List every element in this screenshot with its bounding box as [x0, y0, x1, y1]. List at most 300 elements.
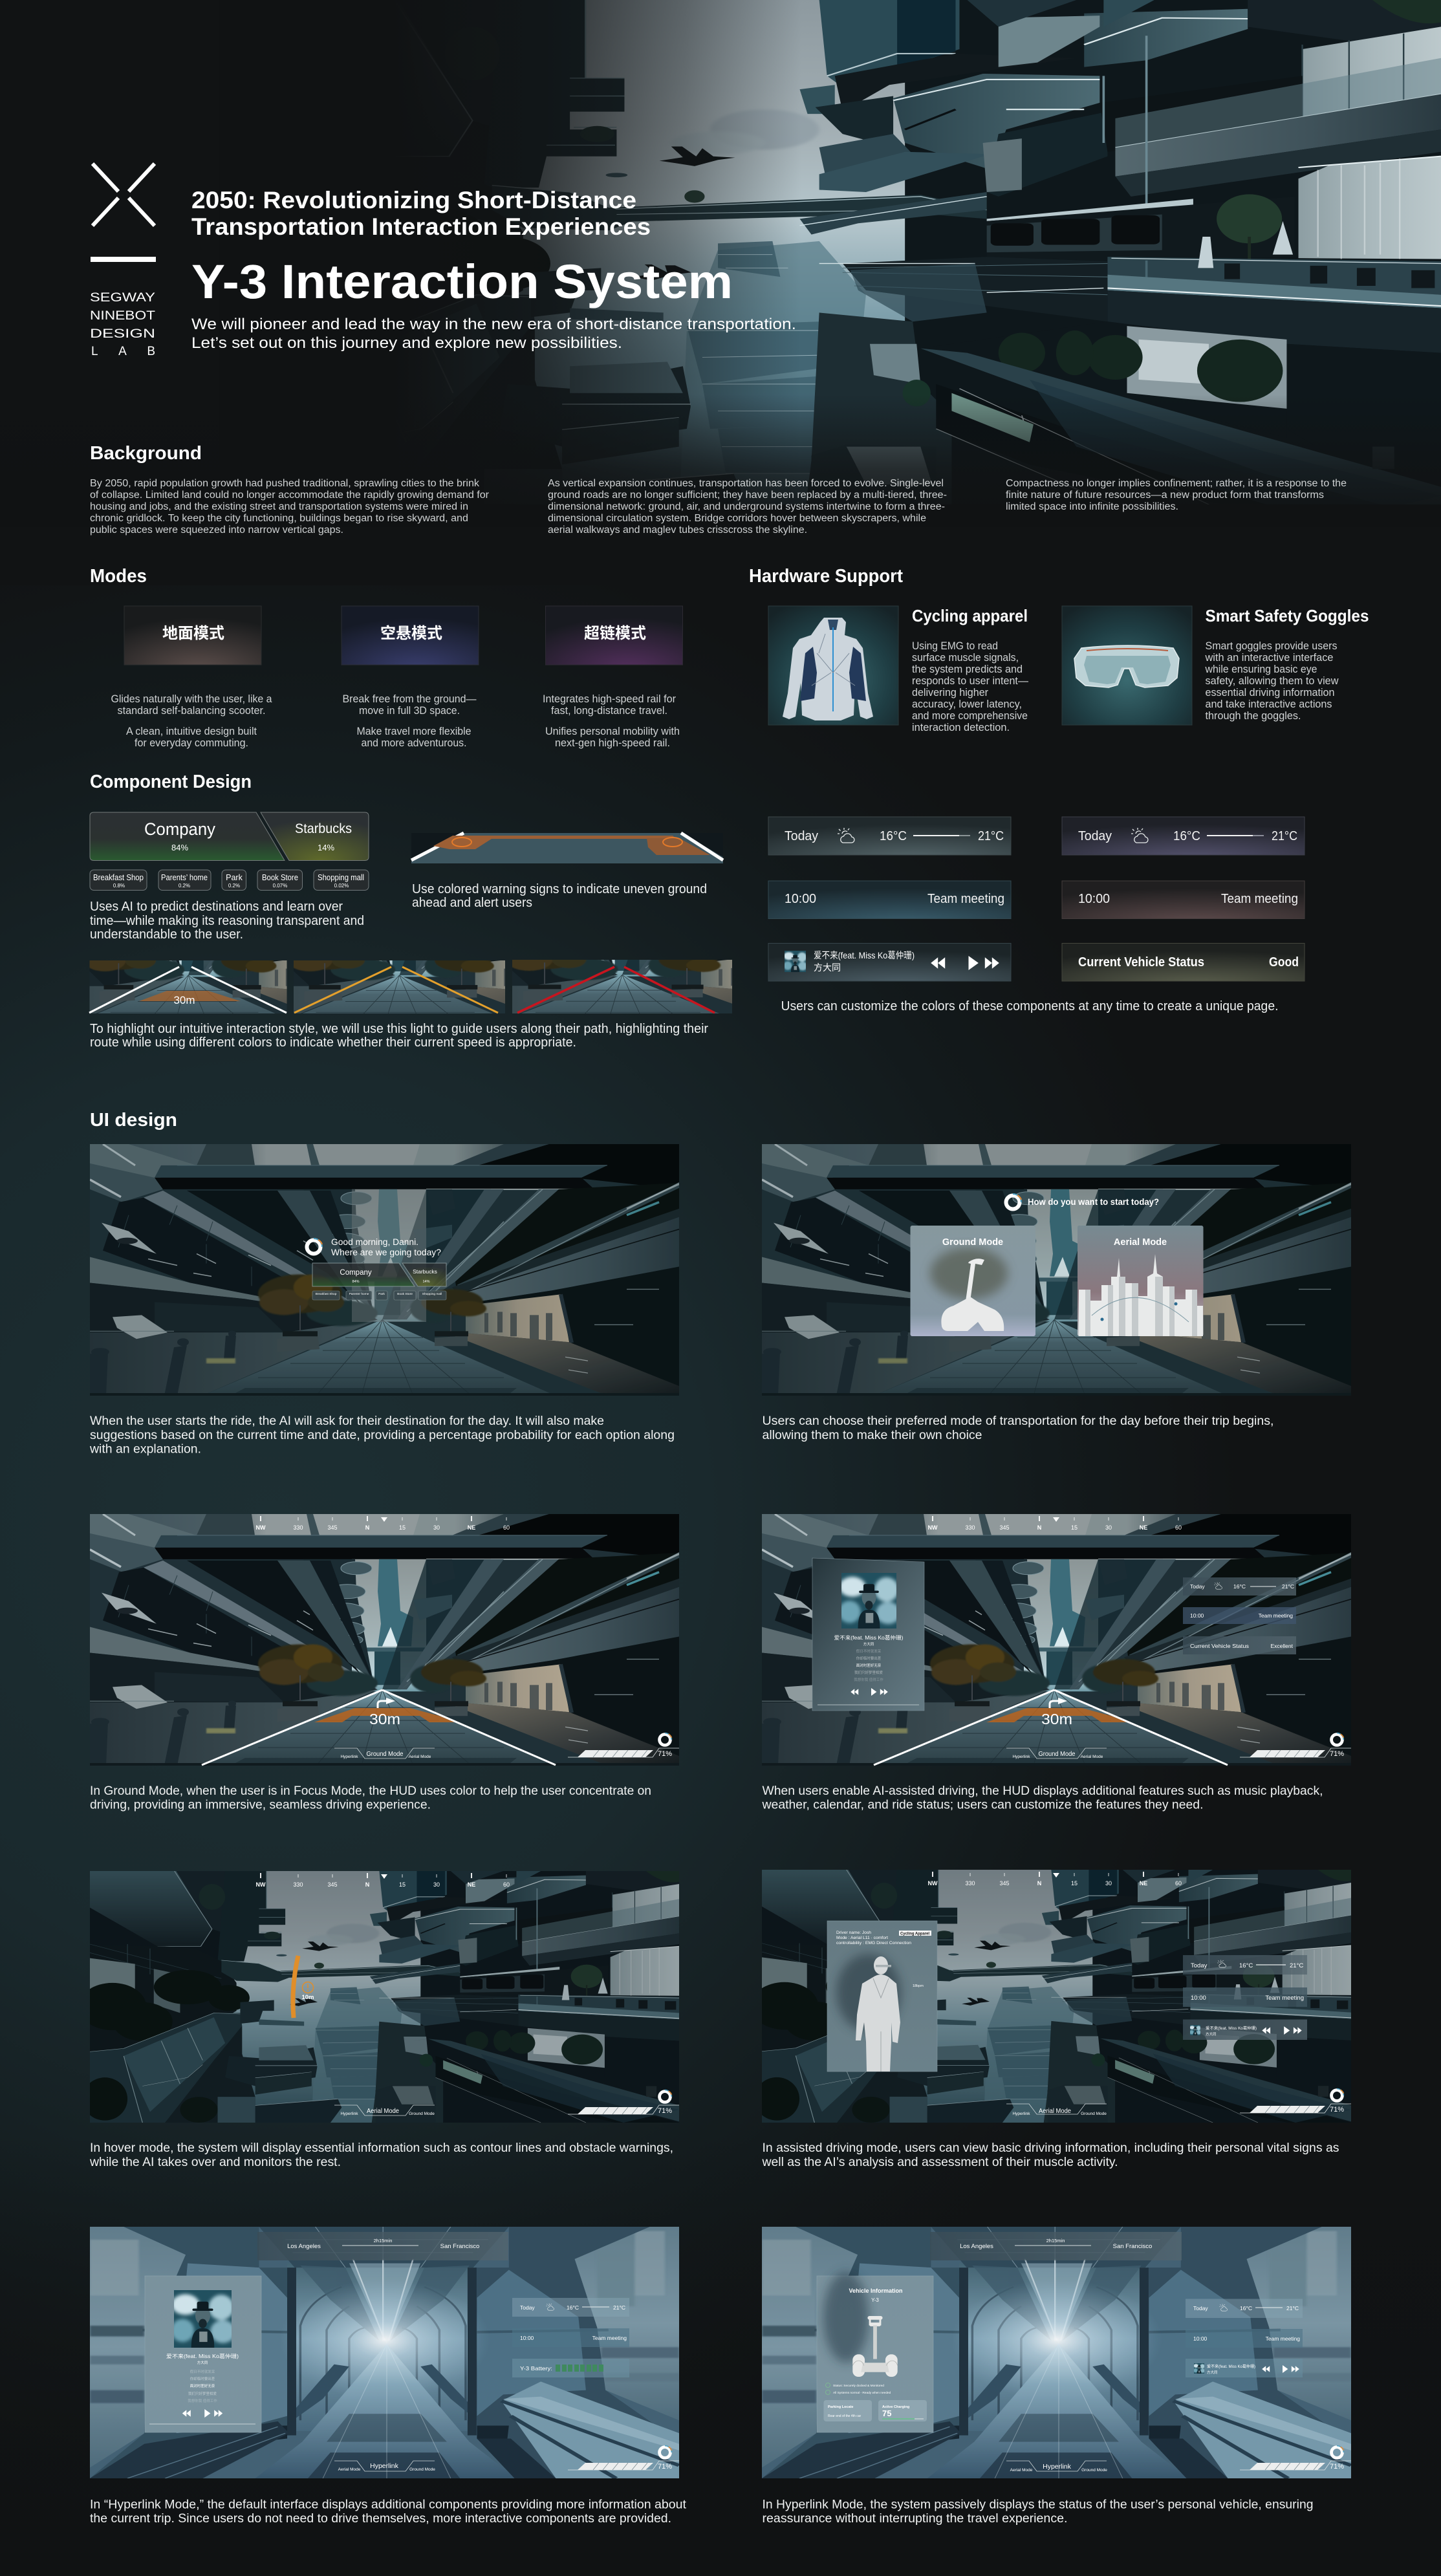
route bar: San Francisco	[440, 2243, 479, 2250]
text: guide light description: To highlight our intuitive interaction style, we will use this light to guide users along their path, highlighting their	[90, 1022, 708, 1036]
card: music player: 你却临时要出差	[856, 1656, 882, 1661]
icon: X mark	[0, 0, 155, 226]
mini destination widget: Book Store	[397, 1292, 413, 1296]
section: background: limited space into infinite possibilities.	[1006, 501, 1178, 512]
component: music widget: 方大同	[814, 962, 841, 973]
panel: smart safety goggles: Smart Safety Goggles	[1206, 606, 1369, 625]
component: destination prediction	[90, 812, 369, 890]
mini destination widget: Starbucks	[413, 1268, 437, 1275]
compass: NW	[927, 1524, 938, 1531]
compass: 345	[327, 1881, 338, 1888]
text: screen 7 description: In “Hyperlink Mode,” the default interface displays additional components providing more information about	[90, 2498, 687, 2512]
card: driver information: Driver name: Josh	[836, 1931, 871, 1935]
widgets: weather, calendar, music: 16°C	[1240, 2305, 1252, 2311]
text: mode descriptions: Glides naturally with the user, like a	[111, 693, 272, 705]
text: screen 5 description	[89, 2141, 673, 2169]
card: driver information: controllability : EMG Direct Connection	[836, 1941, 911, 1945]
status: battery 71%: 71%	[1330, 1750, 1344, 1758]
section: background: By 2050, rapid population growth had pushed traditional, sprawling cities to the brink	[90, 478, 479, 489]
text: screen 4 description	[762, 1784, 1323, 1812]
card: music player: 我们只好梦里相爱	[854, 1670, 883, 1675]
road HUD: 30m	[369, 1711, 400, 1727]
hero city image	[0, 0, 1441, 585]
widgets: weather, calendar, status: 21°C	[1282, 1583, 1294, 1590]
compass: 60	[503, 1524, 510, 1531]
mode tabs: Aerial Mode	[367, 2107, 399, 2115]
status: battery 71%: 71%	[658, 1750, 672, 1758]
text: screen 4 description: weather, calendar, and ride status; users can customize the features they need.	[762, 1798, 1203, 1812]
UI screen: hover mode	[79, 1871, 679, 2123]
status: battery 71%	[568, 2090, 679, 2115]
text: screen 6 description: In assisted driving mode, users can view basic driving information, including their personal vital signs as	[762, 2141, 1339, 2155]
card: ground mode: Ground Mode	[942, 1237, 1003, 1248]
panel: smart safety goggles: with an interactive interface	[1205, 651, 1334, 664]
compass	[256, 1873, 510, 1888]
text: mode descriptions: move in full 3D space.	[359, 704, 460, 717]
component: destination prediction: 84%	[171, 843, 188, 852]
road image: yellow line	[134, 827, 669, 1040]
widgets: weather, calendar, status: Current Vehicle Status	[1190, 1643, 1249, 1649]
obstacle warning arc: 10m	[301, 1994, 314, 2001]
heading: Hardware Support: Hardware Support	[749, 566, 903, 587]
route bar: Los Angeles	[960, 2243, 993, 2250]
panel: cycling apparel: Cycling apparel	[912, 606, 1028, 625]
UI screen: destination prompt: Good morning, Danni.	[331, 1237, 418, 1247]
obstacle warning arc	[293, 1956, 314, 2018]
component: vehicle status widget	[1062, 943, 1305, 981]
road HUD	[202, 1690, 556, 1765]
text: mode descriptions: Integrates high-speed rail for	[543, 693, 676, 705]
component: weather widget grey: Today	[785, 829, 818, 843]
card: music player: 你却临时要出差	[190, 2376, 215, 2381]
status: battery 71%: 71%	[1330, 2106, 1344, 2114]
component: destination prediction: Parents’ home	[161, 873, 208, 882]
text: screen 5 description: while the AI takes over and monitors the rest.	[89, 2155, 341, 2169]
card: vehicle information: Active Charging	[882, 2405, 909, 2409]
widgets: weather, calendar, music: Team meeting	[1266, 2335, 1300, 2342]
heading: Component Design: Component Design	[90, 772, 252, 792]
component: destination prediction: Breakfast Shop	[93, 873, 144, 882]
text: screen 4 description: When users enable AI-assisted driving, the HUD displays additional features such as music playback,	[762, 1784, 1323, 1798]
section: background: Background	[90, 443, 202, 464]
card: vehicle information: Rear end of the 4th car	[828, 2414, 861, 2418]
mode tabs	[334, 2105, 435, 2116]
status: battery 71%: 71%	[658, 2107, 672, 2115]
widgets: weather, calendar, status	[1183, 1577, 1296, 1654]
compass: 30	[1105, 1880, 1112, 1887]
panel: cycling apparel: delivering higher	[912, 686, 988, 698]
compass: NE	[468, 1881, 475, 1888]
compass: 345	[999, 1880, 1010, 1887]
component: destination prediction: 0.2%	[228, 883, 240, 889]
section: background: chronic gridlock. To keep the city functioning, buildings began to rise skyward, and	[90, 513, 468, 524]
panel: mode cards: 超链模式	[584, 625, 646, 642]
panel: cycling apparel	[768, 606, 1028, 733]
text: mode descriptions: fast, long-distance travel.	[551, 704, 667, 717]
road HUD	[874, 1690, 1228, 1765]
widgets: weather, calendar, music	[1183, 1955, 1307, 2040]
logo: Segway Ninebot Design Lab: LAB	[91, 345, 155, 358]
text: screen 3 description	[90, 1784, 651, 1812]
section: background: housing and jobs, and the existing street and transportation systems were mired in	[90, 501, 468, 512]
component: calendar widget rose: 10:00	[1078, 892, 1110, 906]
card: vehicle information: Parking Locate	[828, 2405, 853, 2409]
text: screen 2 description	[762, 1414, 1274, 1442]
component: weather widget grey: 21°C	[978, 829, 1004, 843]
text: screen 6 description: well as the AI’s analysis and assessment of their muscle activity.	[762, 2155, 1118, 2169]
card: music player	[145, 2276, 261, 2432]
mini destination widget: Breakfast Shop	[316, 1292, 337, 1296]
compass: NE	[468, 1524, 475, 1531]
road image: white line	[0, 827, 440, 1040]
widgets: weather, calendar, music: 方大同	[1206, 2031, 1217, 2037]
section: background: dimensional network: ground, air, and underground systems intertwine to form a three-	[548, 501, 945, 512]
widgets: weather, calendar, battery: Y-3 Battery:	[520, 2365, 552, 2372]
title block: Y-3 Interaction System	[191, 255, 733, 308]
card: music player: 我们只好梦里相爱	[188, 2391, 217, 2396]
text: screen 8 description: reassurance without interrupting the travel experience.	[762, 2511, 1067, 2526]
UI screen: ground focus mode	[90, 1514, 679, 1766]
mini destination widget: Park	[378, 1292, 385, 1296]
panel: smart safety goggles: through the goggles.	[1206, 709, 1301, 722]
icon: self-balancing scooter	[852, 2316, 898, 2377]
card: ground mode	[911, 1226, 1035, 1336]
mode tabs: Hyperlink	[370, 2462, 399, 2470]
component: weather widget lilac: 21°C	[1272, 829, 1297, 843]
mode tabs: Ground Mode	[1081, 2468, 1107, 2473]
section: background: of collapse. Limited land could no longer accommodate the rapidly growing demand for	[90, 490, 489, 501]
text: mode descriptions: next-gen high-speed rail.	[555, 737, 670, 749]
text: screen 2 description: Users can choose their preferred mode of transportation for the day before their trip begins,	[762, 1414, 1274, 1428]
widgets: weather, calendar, music: 10:00	[1193, 2335, 1208, 2342]
panel: smart safety goggles	[1062, 606, 1369, 725]
card: music player: 爱不来(feat. Miss Ko葛仲珊)	[166, 2353, 239, 2359]
route bar: San Francisco	[1113, 2243, 1152, 2250]
UI screen: hyperlink mode with vehicle information	[762, 2227, 1351, 2478]
panel: cycling apparel: the system predicts and	[912, 663, 1023, 675]
card: music player: 假日不时就发呆	[856, 1649, 882, 1654]
panel: cycling apparel: and more comprehensive	[912, 709, 1028, 722]
text: screen 3 description: In Ground Mode, when the user is in Focus Mode, the HUD uses color to help the user concentrate on	[90, 1784, 651, 1798]
compass: 60	[1175, 1524, 1182, 1531]
card: music player: 爱不来(feat. Miss Ko葛仲珊)	[834, 1634, 904, 1641]
status: battery 71%	[1240, 2446, 1351, 2471]
text: screen 2 description: allowing them to make their own choice	[762, 1428, 982, 1442]
component: destination prediction: Park	[226, 873, 243, 882]
panel: smart safety goggles: essential driving information	[1206, 686, 1335, 698]
text: mode descriptions: and more adventurous.	[361, 737, 467, 749]
widgets: weather, calendar, status: 16°C	[1233, 1583, 1246, 1590]
widgets: weather, calendar, battery: 10:00	[520, 2335, 534, 2341]
card: vehicle information: Status: Securely docked & Monitored	[833, 2384, 884, 2388]
component: destination prediction: 0.07%	[273, 883, 287, 889]
logo: Segway Ninebot Design Lab: NINEBOT	[90, 309, 155, 323]
UI screen: assisted ground mode	[762, 1514, 1351, 1766]
text: screen 1 description: with an explanation.	[89, 1442, 201, 1456]
compass: 330	[293, 1881, 303, 1888]
compass: 60	[1175, 1880, 1182, 1887]
text: guide light description: route while using different colors to indicate whether their current speed is appropriate.	[90, 1035, 576, 1050]
compass: 330	[293, 1524, 303, 1531]
component: destination prediction: 0.2%	[179, 883, 190, 889]
component: weather widget lilac: 16°C	[1173, 829, 1200, 843]
status: battery 71%: 71%	[1330, 2463, 1344, 2471]
card: music player: 我想你我 值得工作	[854, 1677, 883, 1682]
mode tabs: Aerial Mode	[338, 2467, 361, 2472]
compass: 345	[327, 1524, 338, 1531]
mode tabs	[1006, 1748, 1107, 1759]
text: mode descriptions: Unifies personal mobility with	[545, 725, 680, 737]
mini destination widget	[312, 1263, 446, 1300]
mode tabs: Hyperlink	[1043, 2463, 1072, 2471]
card: aerial mode	[1078, 1226, 1203, 1336]
widgets: weather, calendar, status: Excellent	[1270, 1643, 1294, 1649]
compass: 345	[999, 1524, 1010, 1531]
widgets: weather, calendar, music: 21°C	[1290, 1962, 1303, 1969]
component: destination prediction: 0.02%	[334, 883, 349, 889]
mode tabs: Aerial Mode	[409, 1755, 431, 1759]
route bar	[257, 2232, 508, 2260]
panel: cycling apparel: accuracy, lower latency,	[912, 698, 1022, 710]
panel: cycling apparel: interaction detection.	[912, 721, 1010, 733]
status: battery 71%	[1240, 2089, 1351, 2114]
section: background: aerial walkways and maglev tubes crisscross the skyline.	[548, 525, 807, 536]
text: screen 8 description	[762, 2498, 1313, 2526]
panel: smart safety goggles: and take interactive actions	[1206, 698, 1332, 710]
status: battery 71%	[568, 2446, 679, 2471]
panel: smart safety goggles: safety, allowing them to view	[1206, 675, 1339, 687]
city model	[1079, 1254, 1203, 1336]
UI screen: hyperlink mode with music	[90, 2227, 679, 2478]
text: customization description: Users can customize the colors of these components at any time to create a unique page.	[781, 999, 1278, 1013]
section: background: As vertical expansion continues, transportation has been forced to evolve. Single-level	[548, 478, 944, 489]
mode tabs: Ground Mode	[1081, 2112, 1107, 2116]
card: vehicle information: All Systems normal - Ready when needed	[833, 2391, 891, 2395]
card: driver information: Mode : Aerial L11 · comfort	[836, 1936, 888, 1940]
component: calendar widget rose: Team meeting	[1221, 892, 1298, 906]
compass: 330	[965, 1524, 975, 1531]
route bar: Los Angeles	[287, 2243, 321, 2250]
component: destination prediction: Starbucks	[295, 821, 352, 836]
mode tabs	[1006, 2104, 1107, 2116]
widgets: weather, calendar, battery: 21°C	[613, 2304, 625, 2311]
widgets: weather, calendar, battery: 16°C	[567, 2304, 579, 2311]
panel: cycling apparel: Using EMG to read	[912, 640, 998, 652]
mode tabs: Ground Mode	[409, 2112, 435, 2116]
mode tabs: Aerial Mode	[1039, 2107, 1071, 2115]
road image: red line	[346, 824, 903, 1040]
card: vehicle information	[817, 2272, 933, 2432]
text: screen 7 description	[90, 2498, 687, 2526]
component: calendar widget blue: Team meeting	[927, 892, 1004, 906]
mode tabs	[1006, 2461, 1107, 2473]
card: driver information: Cycling Apparel	[900, 1932, 929, 1936]
status: battery 71%	[1240, 1733, 1351, 1758]
widgets: weather, calendar, battery: Team meeting	[592, 2335, 627, 2341]
panel: mode cards	[124, 606, 683, 665]
widgets: weather, calendar, music: Team meeting	[1265, 1995, 1304, 2002]
widgets: weather, calendar, music: Today	[1193, 2305, 1208, 2311]
text: AI prediction description: time—while making its reasoning transparent and	[90, 914, 364, 928]
compass: 15	[1071, 1880, 1078, 1887]
mode tabs: Ground Mode	[1039, 1750, 1076, 1758]
component: destination prediction: Book Store	[262, 873, 298, 882]
widgets: weather, calendar, music: Today	[1191, 1962, 1208, 1969]
mini destination widget: Shopping mall	[422, 1292, 442, 1296]
compass: N	[1037, 1524, 1041, 1531]
card: music player: 我想你我 值得工作	[188, 2398, 217, 2403]
compass: 60	[503, 1881, 510, 1888]
mode tabs	[334, 2461, 435, 2472]
UI screen: mode selection	[762, 1144, 1351, 1396]
compass	[927, 1872, 1182, 1887]
card: music player: 方大同	[197, 2360, 208, 2365]
card: music player: 方大同	[863, 1641, 874, 1647]
panel: cycling apparel: responds to user intent—	[912, 675, 1028, 687]
text: screen 1 description	[89, 1414, 675, 1456]
section: background: public spaces were squeezed into narrow vertical gaps.	[90, 525, 343, 536]
icon: jacket	[783, 618, 873, 720]
component: music widget	[768, 943, 1011, 981]
component: calendar widget blue	[768, 881, 1011, 918]
widgets: weather, calendar, status: 10:00	[1190, 1612, 1204, 1619]
widgets: weather, calendar, status: Team meeting	[1259, 1612, 1293, 1619]
mode tabs: Aerial Mode	[1010, 2468, 1033, 2473]
widgets: weather, calendar, music: 21°C	[1286, 2305, 1299, 2311]
component: destination prediction: Company	[144, 819, 215, 839]
title block: 2050: Revolutionizing Short-Distance	[191, 187, 636, 213]
text: mode descriptions: standard self-balancing scooter.	[118, 704, 265, 717]
text: screen 6 description	[762, 2141, 1339, 2169]
status: battery 71%: 71%	[658, 2463, 672, 2471]
component: calendar widget rose	[1062, 881, 1305, 918]
mode tabs: Ground Mode	[366, 1750, 404, 1758]
compass: NW	[256, 1881, 266, 1888]
logo: Segway Ninebot Design Lab: SEGWAY	[90, 291, 155, 305]
component: weather widget grey	[768, 817, 1011, 855]
text: mode descriptions: for everyday commuting.	[135, 737, 248, 749]
component: weather widget grey: 16°C	[880, 829, 907, 843]
title block: Transportation Interaction Experiences	[191, 213, 651, 240]
widgets: weather, calendar, music: 16°C	[1239, 1962, 1253, 1969]
component: music widget: 爱不来(feat. Miss Ko葛仲珊)	[814, 950, 915, 960]
title block: Let’s set out on this journey and explore new possibilities.	[191, 334, 622, 352]
road image: white line: 30m	[173, 994, 195, 1006]
logo: Segway Ninebot Design Lab: DESIGN	[90, 327, 155, 341]
compass: N	[1037, 1880, 1041, 1887]
route bar: 2h15min	[1046, 2238, 1065, 2244]
panel: cycling apparel: surface muscle signals,	[912, 651, 1019, 664]
mode tabs: Hyperlink	[1012, 2112, 1030, 2116]
widgets: weather, calendar, music	[1186, 2299, 1303, 2377]
text: screen 5 description: In hover mode, the system will display essential information such as contour lines and obstacle warnings,	[90, 2141, 673, 2155]
title block: We will pioneer and lead the way in the new era of short-distance transportation.	[191, 316, 796, 333]
compass: 30	[433, 1881, 440, 1888]
panel: mode cards: 空悬模式	[380, 625, 442, 642]
card: vehicle information: 75	[882, 2408, 891, 2418]
card: music player: 假日不时就发呆	[190, 2369, 215, 2374]
text: screen 3 description: driving, providing an immersive, seamless driving experience.	[90, 1798, 431, 1812]
component: weather widget lilac: Today	[1078, 829, 1112, 843]
section: background: finite nature of future resources—a new product form that transforms	[1006, 490, 1324, 501]
compass	[256, 1516, 510, 1531]
mini destination widget: Parents’ home	[349, 1292, 369, 1296]
section: background: dimensional circulation system. Bridge corridors hover between skyscrapers, while	[548, 513, 926, 524]
heading: Modes: Modes	[90, 566, 147, 587]
compass: 30	[1105, 1524, 1112, 1531]
card: driver information	[827, 1921, 937, 2072]
panel: smart safety goggles: while ensuring basic eye	[1205, 663, 1317, 675]
component: destination prediction: Shopping mall	[318, 873, 364, 882]
compass: NE	[1140, 1524, 1147, 1531]
title block	[191, 187, 796, 352]
compass: NW	[927, 1880, 938, 1887]
mode tabs	[334, 1748, 435, 1759]
mini destination widget: 84%	[352, 1280, 360, 1284]
text: mode descriptions	[111, 693, 680, 749]
status: battery 71%	[568, 1733, 679, 1758]
mode tabs: Hyperlink	[340, 2112, 358, 2116]
text: screen 1 description: When the user starts the ride, the AI will ask for their destination for the day. It will also make	[90, 1414, 604, 1428]
panel: mode cards: 地面模式	[162, 625, 224, 642]
mode tabs: Aerial Mode	[1081, 1755, 1103, 1759]
widgets: weather, calendar, battery	[512, 2298, 629, 2377]
compass	[927, 1516, 1182, 1531]
widgets: weather, calendar, music: 方大同	[1207, 2370, 1218, 2375]
text: warning sign description: ahead and alert users	[412, 896, 532, 910]
compass: 15	[399, 1881, 406, 1888]
component: calendar widget blue: 10:00	[785, 892, 816, 906]
component: warning sign road strip	[411, 833, 723, 863]
compass: 15	[399, 1524, 406, 1531]
section: background: Compactness no longer implies confinement; rather, it is a response to the	[1006, 478, 1347, 489]
component: vehicle status widget: Good	[1269, 955, 1299, 969]
text: warning sign description	[412, 882, 707, 910]
card: vehicle information: Y-3	[871, 2297, 879, 2303]
text: mode descriptions: A clean, intuitive design built	[126, 725, 257, 737]
component: destination prediction: 14%	[318, 843, 334, 852]
component: vehicle status widget: Current Vehicle Status	[1078, 955, 1204, 969]
mini destination widget: Company	[340, 1269, 372, 1277]
compass: 330	[965, 1880, 975, 1887]
UI screen: destination prompt	[90, 1144, 679, 1396]
compass: NE	[1140, 1880, 1147, 1887]
text: guide light description	[90, 1022, 708, 1050]
compass: NW	[256, 1524, 266, 1531]
card: music player: 面对时差好无奈	[190, 2383, 215, 2388]
route bar	[930, 2232, 1182, 2260]
text: AI prediction description	[90, 900, 364, 942]
panel: smart safety goggles: Smart goggles provide users	[1206, 640, 1338, 652]
text: mode descriptions: Make travel more flexible	[357, 725, 471, 737]
widgets: weather, calendar, music: 爱不来(feat. Miss Ko葛仲珊)	[1206, 2026, 1257, 2031]
compass: N	[365, 1881, 369, 1888]
UI screen: mode selection: How do you want to start today?	[1028, 1197, 1159, 1207]
logo: Segway Ninebot Design Lab	[0, 0, 156, 358]
section: background: ground roads are no longer sufficient; they have been replaced by a multi-tiered, three-	[548, 490, 947, 501]
compass: 30	[433, 1524, 440, 1531]
mini destination widget: 14%	[422, 1280, 430, 1284]
text: screen 8 description: In Hyperlink Mode, the system passively displays the status of the user’s personal vehicle, ensuring	[762, 2498, 1313, 2512]
widgets: weather, calendar, status: Today	[1190, 1583, 1205, 1590]
text: warning sign description: Use colored warning signs to indicate uneven ground	[412, 882, 707, 896]
card: driver information: 18bpm	[913, 1984, 924, 1988]
text: AI prediction description: Uses AI to predict destinations and learn over	[90, 900, 343, 914]
text: AI prediction description: understandable to the user.	[90, 927, 243, 942]
card: aerial mode: Aerial Mode	[1114, 1237, 1167, 1248]
card: music player: 面对时差好无奈	[856, 1663, 882, 1668]
component: weather widget lilac	[1062, 817, 1305, 855]
